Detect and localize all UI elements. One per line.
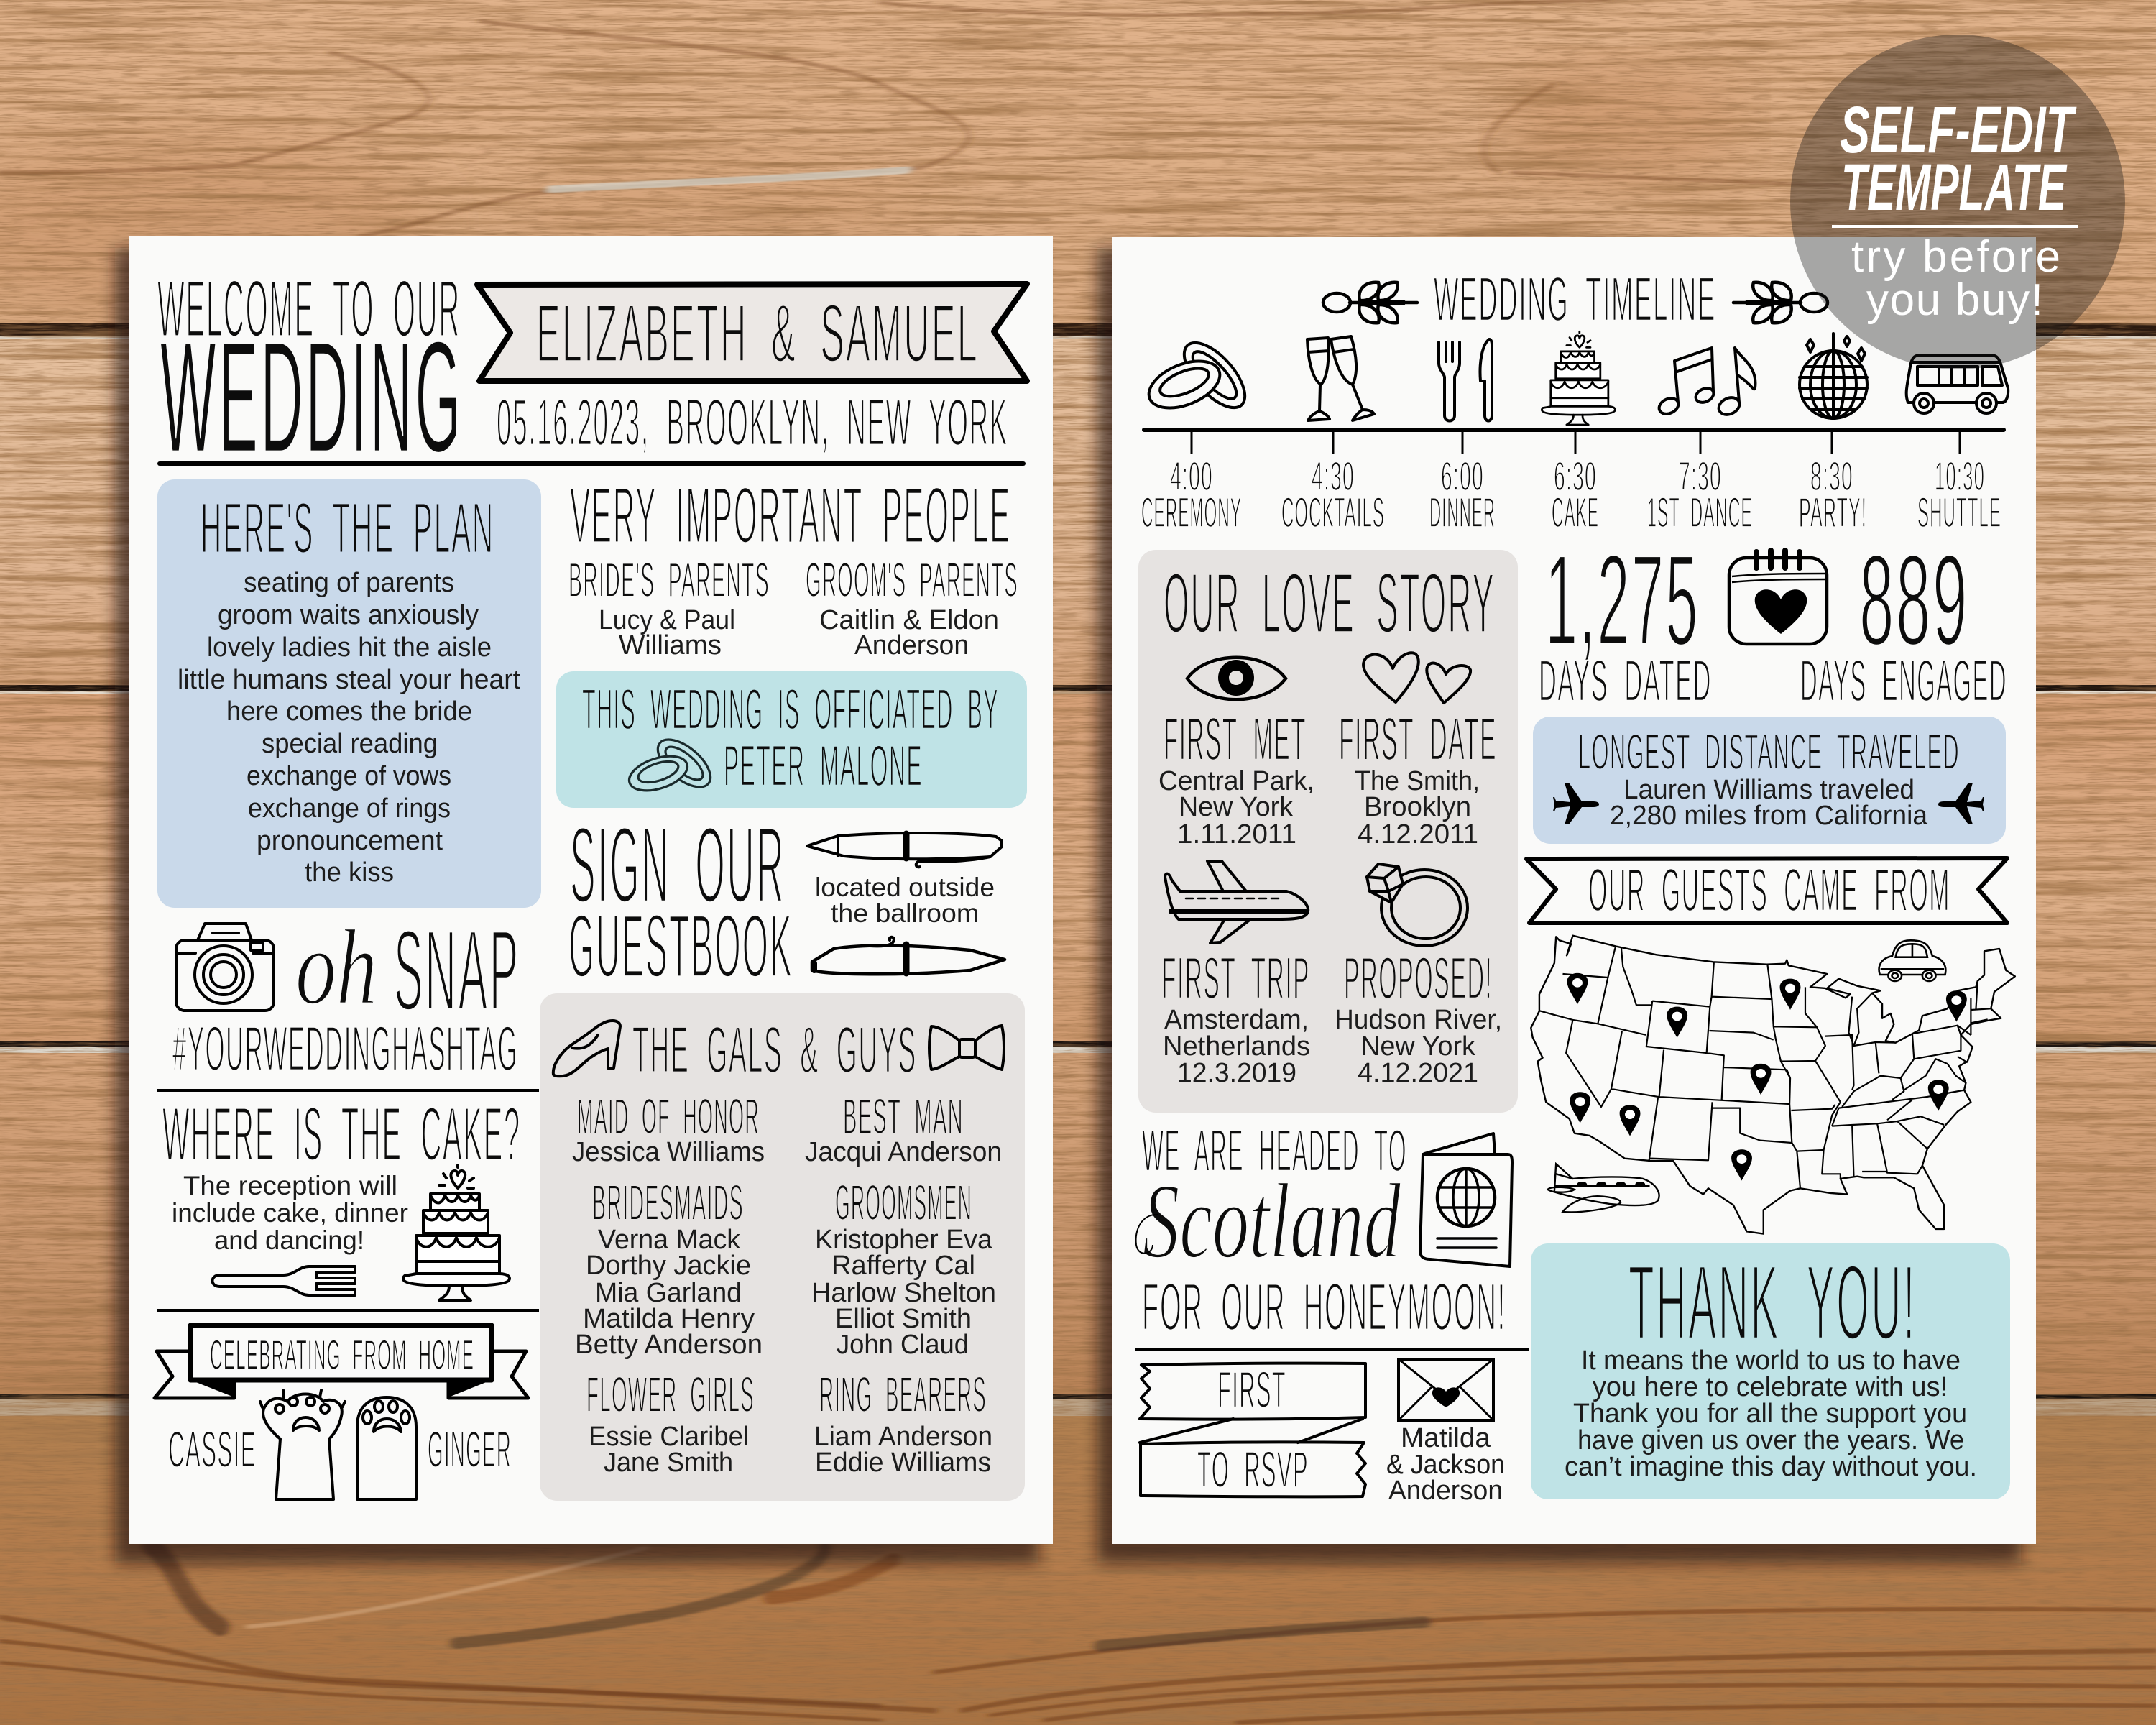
right card: timeline and story: DAYS DATED xyxy=(1539,648,1712,714)
first date: Brooklyn xyxy=(1364,792,1471,822)
icon: laurel right xyxy=(1733,282,1828,323)
first date xyxy=(1339,705,1497,850)
first date: 4.12.2011 xyxy=(1358,819,1478,850)
rsvp contact: Matilda xyxy=(1401,1423,1491,1453)
timeline: DINNER xyxy=(1429,489,1496,536)
left card: welcome program: CASSIE xyxy=(168,1422,257,1478)
flower girls xyxy=(586,1366,755,1478)
we are headed to scotland xyxy=(1136,1117,1506,1344)
name banner xyxy=(477,284,1027,381)
flower girls: Jane Smith xyxy=(604,1448,733,1478)
card shadows xyxy=(115,248,2021,1563)
right card: timeline and story: 1,275 xyxy=(1545,528,1700,673)
best man xyxy=(805,1088,1002,1167)
badge tagline: you buy! xyxy=(1866,275,2043,325)
stat: days engaged: 889 xyxy=(1859,528,1969,673)
timeline stop: ceremony xyxy=(1141,454,1242,536)
first date: The Smith, xyxy=(1355,766,1480,796)
timeline: COCKTAILS xyxy=(1281,489,1385,536)
icon: envelope xyxy=(1399,1359,1493,1420)
oh snap: oh xyxy=(295,908,377,1027)
timeline stop: cocktails: 4:30 xyxy=(1312,454,1355,500)
icon: cat paw xyxy=(260,1390,345,1499)
guestbook location: located outside xyxy=(815,873,995,902)
best man: Jacqui Anderson xyxy=(805,1137,1002,1167)
proposed xyxy=(1335,944,1502,1088)
first met xyxy=(1158,705,1314,850)
ring bearers: Liam Anderson xyxy=(814,1422,992,1452)
icon: calendar heart xyxy=(1729,551,1827,644)
bridesmaids: Verna Mack xyxy=(598,1225,741,1255)
best man: BEST MAN xyxy=(843,1088,964,1144)
map state borders xyxy=(1539,947,1991,1188)
icon: cake xyxy=(1542,331,1616,425)
groomsmen: Kristopher Eva xyxy=(815,1225,993,1255)
timeline stop: shuttle xyxy=(1917,454,2001,536)
timeline stop: cocktails xyxy=(1281,454,1385,536)
panel: longest distance traveled: Lauren Williams traveled xyxy=(1623,775,1915,805)
badge tagline xyxy=(1851,232,2060,325)
left card: welcome program: #YOURWEDDINGHASHTAG xyxy=(172,1013,518,1084)
first met: New York xyxy=(1179,792,1294,822)
groom's parents: Anderson xyxy=(854,630,969,661)
plan list: little humans steal your heart xyxy=(178,665,520,695)
groomsmen xyxy=(811,1174,996,1360)
timeline stop: first dance xyxy=(1647,454,1753,536)
icon: shuttle bus xyxy=(1907,355,2008,413)
left card: welcome program: SIGN OUR xyxy=(570,804,786,925)
icon: fork xyxy=(213,1266,355,1295)
proposed: 4.12.2021 xyxy=(1358,1058,1478,1088)
icon: dog paw xyxy=(357,1397,416,1499)
infographic: wedding program cards on wood: 05.16.2023, BROOKLYN, NEW YORK xyxy=(497,386,1008,459)
reception text: The reception will xyxy=(183,1171,397,1200)
timeline: CAKE xyxy=(1552,489,1599,536)
left card: welcome program: BRIDE'S PARENTS xyxy=(568,553,770,607)
icon: disco ball xyxy=(1800,334,1867,418)
timeline stop: party: 8:30 xyxy=(1810,454,1853,500)
panel: the gals and guys: MAID OF HONOR xyxy=(577,1088,760,1144)
icon: high heel shoe xyxy=(553,1021,620,1076)
timeline stop: dinner: 6:00 xyxy=(1441,454,1484,500)
icon: plane right xyxy=(1938,783,1984,824)
ring bearers: Eddie Williams xyxy=(815,1448,991,1478)
flower girls: Essie Claribel xyxy=(589,1422,749,1452)
right card: timeline and story: FOR OUR HONEYMOON! xyxy=(1142,1269,1506,1344)
rsvp contact: Anderson xyxy=(1388,1476,1503,1506)
ribbon: celebrating from home xyxy=(155,1325,528,1398)
left card: welcome program: GUESTBOOK xyxy=(568,897,793,996)
rsvp contact xyxy=(1386,1423,1505,1506)
infographic: wedding program cards on wood: THIS WEDDING IS OFFICIATED BY xyxy=(582,677,999,741)
guestbook location: the ballroom xyxy=(831,898,979,928)
icon: music notes xyxy=(1657,348,1755,418)
panel: thank you xyxy=(1531,1243,2010,1499)
stat: days engaged xyxy=(1800,528,2007,714)
left card: welcome program: RING BEARERS xyxy=(819,1366,987,1422)
right card: timeline and story: OUR LOVE STORY xyxy=(1164,556,1496,651)
maid of honor: Jessica Williams xyxy=(572,1137,765,1167)
chart: us guest map xyxy=(1531,936,2015,1234)
infographic: wedding program cards on wood: GROOM'S PARENTS xyxy=(806,553,1018,607)
plan list: exchange of vows xyxy=(247,761,451,791)
first met: Central Park, xyxy=(1158,766,1314,796)
right card: timeline and story: SHUTTLE xyxy=(1917,489,2001,536)
plan list: exchange of rings xyxy=(248,794,451,824)
icon: wedding rings xyxy=(1142,333,1256,418)
bridesmaids: Matilda Henry xyxy=(583,1304,755,1334)
icon: plane left xyxy=(1553,783,1599,824)
timeline: CEREMONY xyxy=(1141,489,1242,536)
bridesmaids xyxy=(575,1174,763,1360)
timeline stop: dinner xyxy=(1429,454,1496,536)
plan list: lovely ladies hit the aisle xyxy=(207,632,492,663)
panel: the gals and guys: BRIDESMAIDS xyxy=(592,1174,744,1230)
icon: champagne flutes xyxy=(1307,336,1374,420)
timeline stop: first dance: 7:30 xyxy=(1679,454,1722,500)
timeline xyxy=(1141,331,2008,536)
panel: officiant xyxy=(556,671,1027,808)
panel: the gals and guys: FLOWER GIRLS xyxy=(586,1366,755,1422)
icon: rings xyxy=(625,731,719,797)
timeline stop: cake: 6:30 xyxy=(1554,454,1597,500)
panel: the gals and guys: THE GALS & GUYS xyxy=(632,1013,917,1087)
timeline ticks xyxy=(1192,430,1960,454)
ribbon: first to rsvp: TO RSVP xyxy=(1197,1442,1309,1499)
timeline stop: party xyxy=(1799,454,1867,536)
groomsmen: Rafferty Cal xyxy=(831,1251,975,1281)
groom's parents xyxy=(806,553,1018,661)
panel: officiant: PETER MALONE xyxy=(724,734,923,799)
maid of honor xyxy=(572,1088,765,1167)
panel: here's the plan xyxy=(157,479,541,908)
location pins xyxy=(1567,973,1967,1181)
icon: pen top xyxy=(807,833,1002,867)
icon: eye xyxy=(1187,658,1286,699)
panel: our love story: FIRST TRIP xyxy=(1161,944,1310,1011)
icon: cake xyxy=(403,1165,510,1300)
thank you message: have given us over the years. We xyxy=(1577,1425,1964,1455)
icon: fork and knife xyxy=(1439,339,1492,421)
thank you message: It means the world to us to have xyxy=(1581,1346,1961,1376)
panel: longest distance traveled xyxy=(1533,717,2006,844)
timeline stop: ceremony: 4:00 xyxy=(1170,454,1213,500)
reception text: include cake, dinner xyxy=(172,1198,408,1228)
heading: sign our guestbook xyxy=(568,804,793,996)
badge heading xyxy=(1840,93,2077,224)
icon: pen bottom xyxy=(812,937,1005,974)
proposed: New York xyxy=(1360,1031,1476,1062)
infographic: wedding program cards on wood: VERY IMPORTANT PEOPLE xyxy=(570,472,1011,560)
icon: bow tie xyxy=(929,1026,1004,1070)
plan list: groom waits anxiously xyxy=(218,600,479,630)
ribbon: first to rsvp xyxy=(1140,1362,1365,1499)
right card: timeline and story: PROPOSED! xyxy=(1344,944,1493,1011)
first trip xyxy=(1161,944,1310,1088)
left card: welcome program xyxy=(129,236,1053,1544)
timeline stop: shuttle: 10:30 xyxy=(1935,454,1985,500)
rsvp contact: & Jackson xyxy=(1386,1450,1505,1480)
stat: days dated xyxy=(1539,528,1712,714)
right card: timeline and story: FIRST DATE xyxy=(1339,705,1497,773)
right card: timeline and story xyxy=(1112,237,2036,1544)
ring bearers xyxy=(814,1366,992,1478)
thank you message: can’t imagine this day without you. xyxy=(1565,1452,1977,1482)
ribbon: first to rsvp: FIRST xyxy=(1217,1362,1286,1419)
left card: welcome program: WELCOME TO OUR xyxy=(157,264,461,354)
left card: welcome program: ELIZABETH & SAMUEL xyxy=(536,288,979,380)
proposed: Hudson River, xyxy=(1335,1005,1502,1035)
panel: our love story xyxy=(1138,550,1518,1113)
first trip: Netherlands xyxy=(1163,1031,1310,1062)
bride's parents: Williams xyxy=(619,630,722,661)
first trip: Amsterdam, xyxy=(1164,1005,1309,1035)
icon: passport xyxy=(1420,1133,1512,1266)
left card: welcome program: WHERE IS THE CAKE? xyxy=(162,1092,521,1177)
thank you message: you here to celebrate with us! xyxy=(1593,1372,1948,1402)
we are headed to scotland: Scotland xyxy=(1143,1162,1401,1281)
thank you message xyxy=(1565,1346,1977,1482)
plan list: special reading xyxy=(262,729,438,759)
panel: the gals and guys xyxy=(540,993,1025,1501)
plan list: here comes the bride xyxy=(226,696,472,727)
groomsmen: Harlow Shelton xyxy=(811,1278,996,1308)
left card: welcome program: GINGER xyxy=(428,1422,512,1478)
timeline stop: cake xyxy=(1552,454,1599,536)
icon: map plane xyxy=(1548,1164,1659,1212)
icon: camera xyxy=(176,924,274,1011)
ribbon: celebrating from home: CELEBRATING FROM HOME xyxy=(210,1332,474,1379)
icon: car xyxy=(1879,940,1945,981)
badge: self-edit template xyxy=(1790,34,2125,369)
right card: timeline and story: WEDDING TIMELINE xyxy=(1434,264,1716,334)
groom's parents: Caitlin & Eldon xyxy=(819,605,999,635)
icon: hearts xyxy=(1363,653,1470,703)
groomsmen: Elliot Smith xyxy=(835,1304,972,1334)
plan list xyxy=(178,568,520,888)
bride's parents xyxy=(568,553,770,661)
plan list: the kiss xyxy=(305,857,394,888)
icon: laurel left xyxy=(1323,282,1417,323)
panel: the gals and guys: GROOMSMEN xyxy=(835,1174,972,1230)
guestbook location xyxy=(815,873,995,928)
icon: airplane xyxy=(1165,861,1308,943)
map outline xyxy=(1531,936,2015,1234)
panel: longest distance traveled: 2,280 miles from California xyxy=(1610,801,1928,831)
oh snap xyxy=(295,906,520,1034)
icon: diamond ring xyxy=(1367,864,1468,946)
reception text: and dancing! xyxy=(214,1225,364,1255)
left card: welcome program: WEDDING xyxy=(160,308,464,485)
badge tagline: try before xyxy=(1851,232,2060,282)
timeline: PARTY! xyxy=(1799,489,1867,536)
groomsmen: John Claud xyxy=(837,1330,969,1360)
first trip: 12.3.2019 xyxy=(1177,1058,1296,1088)
bridesmaids: Betty Anderson xyxy=(575,1330,763,1360)
thank you message: Thank you for all the support you xyxy=(1573,1399,1967,1429)
we are headed to scotland: WE ARE HEADED TO xyxy=(1142,1117,1407,1184)
bridesmaids: Mia Garland xyxy=(595,1278,742,1308)
reception text xyxy=(172,1171,408,1255)
plan list: seating of parents xyxy=(244,568,454,598)
bride's parents: Lucy & Paul xyxy=(599,605,735,635)
plan list: pronouncement xyxy=(257,826,443,856)
left card: welcome program: SNAP xyxy=(394,906,520,1034)
left card: welcome program: HERE'S THE PLAN xyxy=(201,488,494,569)
first met: 1.11.2011 xyxy=(1177,819,1296,850)
timeline: 1ST DANCE xyxy=(1647,489,1753,536)
panel: our love story: FIRST MET xyxy=(1164,705,1307,773)
bridesmaids: Dorthy Jackie xyxy=(586,1251,751,1281)
banner: our guests came from xyxy=(1526,856,2007,924)
